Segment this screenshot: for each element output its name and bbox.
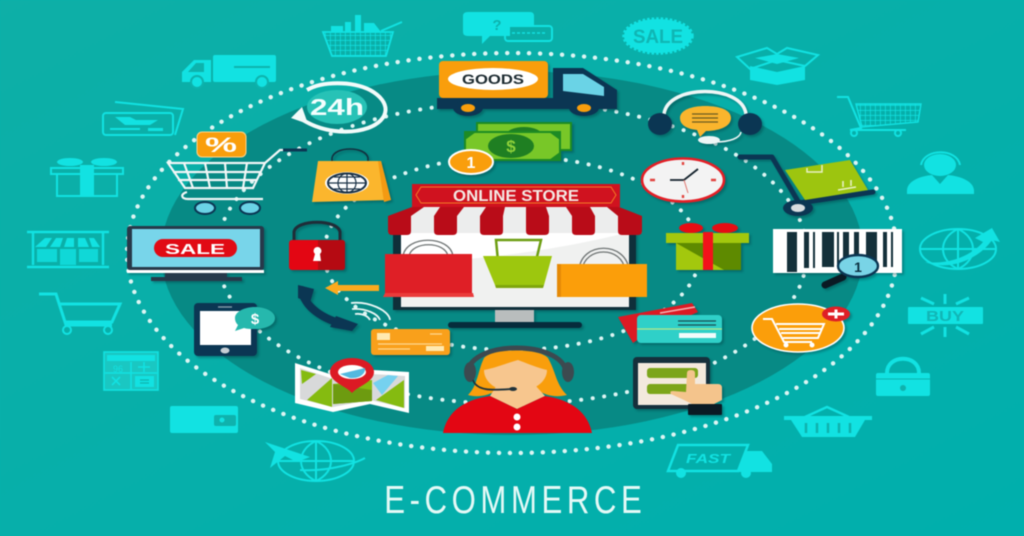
icon: folded map with location pin	[295, 358, 409, 413]
store banner	[412, 184, 620, 207]
arrow: orange pointing left	[325, 281, 379, 295]
icon: cash notes with coin: $	[506, 137, 516, 156]
icon: barcode with magnifier	[773, 229, 902, 285]
title: E-COMMERCE	[384, 479, 642, 522]
icon: faint plane and globe	[265, 441, 365, 481]
icon: faint globe with arrow	[920, 228, 1000, 269]
icon: faint open box	[737, 48, 818, 85]
icon: hand truck with parcel	[740, 157, 873, 216]
magnifier: 1	[854, 259, 862, 275]
icon: contactless waves	[351, 303, 390, 320]
icon: faint padlock	[876, 359, 930, 396]
icon: faint shop front	[27, 232, 109, 267]
hand	[670, 370, 722, 415]
icon: faint wallet	[170, 406, 238, 433]
dotted ring: inner	[324, 156, 700, 350]
icon: orange bank card	[371, 329, 450, 355]
orange shopping bag	[557, 248, 647, 297]
icon: faint sale badge	[624, 19, 692, 53]
icon: faint basket	[784, 407, 872, 437]
goods label	[448, 68, 538, 90]
icon: gift box	[666, 223, 749, 270]
icon: faint gift box	[51, 158, 123, 197]
icon: faint delivery truck	[182, 55, 276, 88]
icon: phone with payment bubble	[194, 303, 275, 356]
icon: telephone handset	[298, 285, 358, 331]
icon: faint credit cards	[103, 102, 183, 135]
icon: shopping bag with globe	[312, 149, 391, 202]
green shopping bag	[483, 240, 552, 288]
icon: laptop with sale sign	[127, 226, 264, 281]
icon: red padlock	[289, 222, 345, 270]
icon: faint buy sign	[908, 294, 983, 337]
icon: cash notes with coin	[449, 123, 571, 174]
icon: faint grocery basket	[323, 15, 402, 56]
dotted ring: outer	[127, 53, 897, 453]
icon: faint fast truck	[668, 445, 772, 478]
store awning	[388, 207, 642, 235]
icon: faint sale badge: SALE	[633, 27, 683, 48]
icon: faint buy sign: BUY	[926, 308, 964, 325]
icon: 24h service clock	[291, 83, 386, 132]
icon: faint speech bubbles	[463, 12, 552, 44]
store banner: ONLINE STORE	[453, 188, 579, 205]
icon: faint call agent	[907, 152, 974, 194]
icon: faint calculator	[104, 352, 158, 390]
icon: headset with speech bubble	[648, 92, 762, 144]
panel: online store	[383, 184, 647, 328]
red shopping bag	[383, 240, 474, 297]
icon: red and teal payment cards	[618, 303, 722, 343]
icon: faint wire cart	[837, 97, 921, 136]
sale pill: SALE	[165, 241, 225, 258]
icon: 24h service clock: 24h	[310, 94, 364, 120]
icon: orange cart circle with plus	[752, 304, 850, 352]
discount tag: %	[205, 134, 238, 157]
plus badge	[822, 306, 850, 322]
dark central disc	[161, 71, 863, 435]
goods label: GOODS	[462, 71, 524, 87]
dotted ring: middle	[217, 102, 807, 404]
icon: faint shopping cart	[39, 294, 120, 334]
icon: faint speech bubbles: ?	[492, 17, 502, 34]
icon: customer service woman	[443, 348, 592, 433]
icon: shopping cart with discount	[168, 132, 307, 214]
icon: goods delivery truck	[437, 61, 617, 116]
icon: wall clock	[642, 158, 724, 202]
icon: faint fast truck: FAST	[686, 451, 731, 466]
icon: faint calculator: 96	[113, 364, 123, 374]
dollar bubble: $	[251, 311, 260, 328]
coin: 1	[467, 155, 476, 172]
icon: tablet with touching hand	[633, 357, 722, 415]
store monitor	[393, 232, 636, 328]
location pin	[330, 358, 374, 393]
